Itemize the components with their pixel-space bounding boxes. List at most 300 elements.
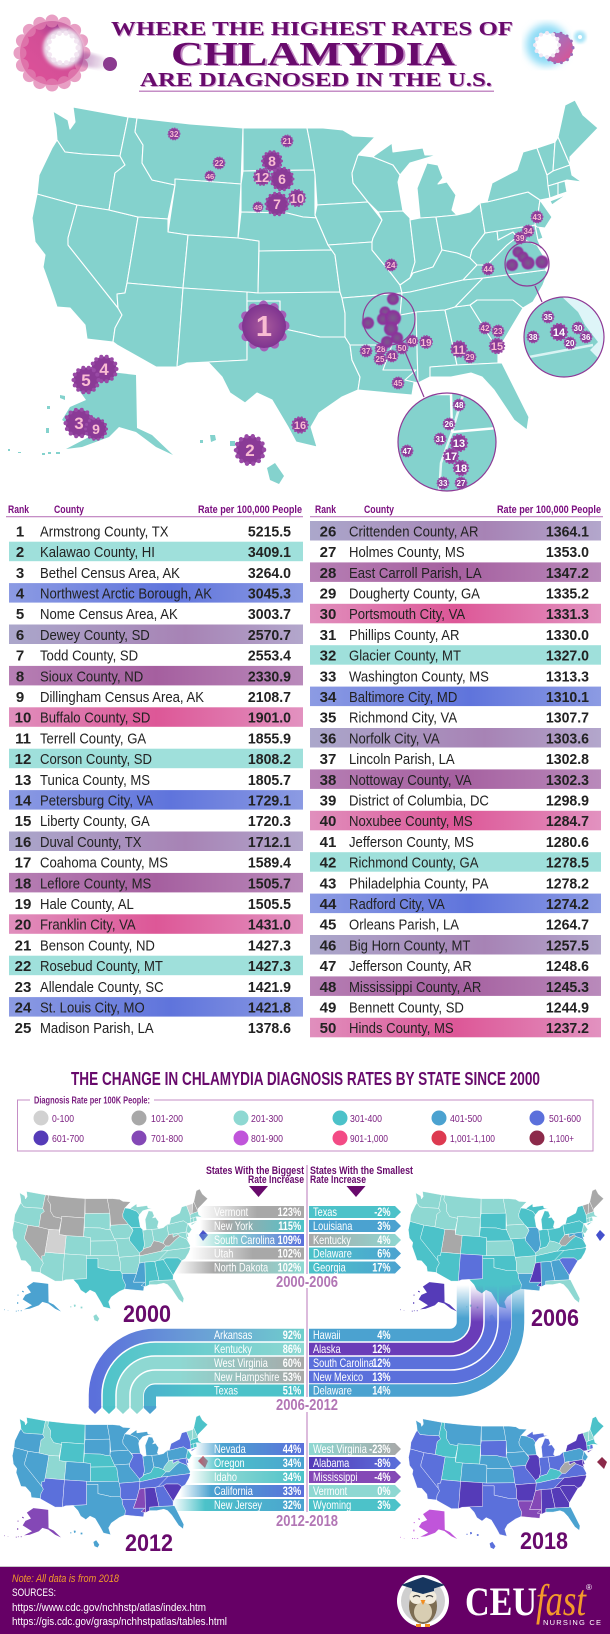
- legend: 101-200: [151, 1113, 183, 1125]
- map markers: ranked counties: [66, 128, 542, 464]
- rates: 5215.5: [248, 524, 291, 541]
- rates: 1310.1: [546, 690, 589, 706]
- bars: 2012-2018 smallest increases: Wyoming: [313, 1500, 351, 1512]
- map markers: ranked counties: 16: [294, 420, 306, 432]
- map markers: ranked counties: 6: [278, 171, 286, 187]
- bars: 2012-2018 biggest increases: Nevada: [214, 1444, 246, 1456]
- curved arrows: 2006-2012 smallest increases: Delaware: [313, 1386, 352, 1398]
- bars: 2012-2018 smallest increases: 3%: [377, 1500, 391, 1512]
- county names: Liberty County, GA: [40, 812, 150, 829]
- rank numbers: 4: [16, 586, 25, 602]
- rates: 1347.2: [546, 565, 589, 582]
- marker: rank 1: [242, 304, 286, 348]
- title: ARE DIAGNOSED IN THE U.S.: [141, 70, 493, 92]
- county names: Norfolk City, VA: [349, 730, 440, 747]
- legend: 601-700: [52, 1133, 84, 1145]
- bars: 2000-2006 biggest increases: New York: [214, 1221, 254, 1233]
- rank numbers: 24: [15, 1000, 32, 1016]
- inset: Mississippi Delta counties: 27: [457, 479, 466, 488]
- bars: 2000-2006 smallest increases: 3%: [377, 1221, 391, 1233]
- bars: 2012-2018 smallest increases: 0%: [377, 1486, 391, 1498]
- bars: 2012-2018 biggest increases: Oregon: [214, 1458, 245, 1470]
- rates: 1327.0: [546, 648, 589, 665]
- curved arrows: 2006-2012 biggest increases: New Hampshire: [214, 1372, 280, 1384]
- rank numbers: 26: [320, 523, 336, 540]
- curved arrows: 2006-2012 smallest increases: [309, 1285, 518, 1398]
- logo: CEUfast Nursing CE: [465, 1576, 601, 1627]
- county names: Bethel Census Area, AK: [40, 564, 180, 581]
- inset: Virginia counties: 14: [553, 327, 566, 339]
- county names: Dewey County, SD: [40, 626, 150, 643]
- rates: 1303.6: [546, 731, 589, 748]
- county names: [40, 523, 213, 1036]
- curved arrows: 2006-2012 smallest increases: 12%: [372, 1344, 391, 1356]
- title: CHLAMYDIA: [171, 36, 456, 73]
- rates: 1505.5: [248, 897, 291, 913]
- title: CHLAMYDIA: [173, 37, 458, 74]
- bars: 2000-2006 biggest increases: Utah: [214, 1249, 234, 1261]
- rank numbers: 45: [320, 917, 336, 934]
- legend: 201-300: [251, 1113, 283, 1125]
- year label: 2012: 2012: [125, 1530, 173, 1557]
- rank numbers: 47: [320, 958, 336, 975]
- county names: Benson County, ND: [40, 937, 155, 954]
- inset: Mississippi Delta counties: 17: [445, 451, 457, 463]
- bars: 2000-2006 biggest increases: 102%: [278, 1263, 301, 1275]
- bars: 2012-2018 biggest increases: 33%: [283, 1486, 301, 1498]
- curved arrows: 2006-2012 smallest increases: New Mexico: [313, 1372, 363, 1384]
- rates: 3003.7: [248, 607, 291, 623]
- map markers: ranked counties: 4: [99, 360, 109, 379]
- table header: Rate per 100,000 People: [198, 504, 302, 516]
- rates: 1330.0: [546, 628, 589, 644]
- rank numbers: 2: [16, 544, 24, 561]
- map markers: ranked counties: 34: [524, 227, 533, 236]
- map markers: ranked counties: 43: [533, 213, 542, 222]
- bars: 2000-2006 smallest increases: -2%: [374, 1207, 391, 1219]
- inset: Virginia counties: [524, 295, 610, 377]
- bars: 2000-2006 biggest increases: 109%: [278, 1235, 301, 1247]
- county names: Noxubee County, MS: [349, 812, 473, 829]
- rank numbers: 22: [15, 958, 31, 975]
- rank numbers: 11: [15, 730, 31, 747]
- map markers: ranked counties: 24: [387, 261, 396, 270]
- table header: [310, 504, 603, 517]
- rates: 1248.6: [546, 959, 589, 975]
- curved arrows: 2006-2012 smallest increases: 14%: [372, 1386, 391, 1398]
- unnumbered marker cluster: Mississippi Delta: [362, 293, 403, 348]
- curved arrows: 2006-2012 biggest increases: 60%: [283, 1358, 301, 1370]
- rank numbers: 46: [320, 937, 336, 954]
- map markers: ranked counties: 2: [245, 441, 255, 460]
- county names: Glacier County, MT: [349, 647, 461, 664]
- county names: Sioux County, ND: [40, 667, 143, 684]
- county names: St. Louis City, MO: [40, 999, 145, 1016]
- map markers: ranked counties: 11: [453, 343, 466, 357]
- rates: 1335.2: [546, 586, 589, 603]
- county names: Corson County, SD: [40, 750, 152, 767]
- bars: 2000-2006 smallest increases: Louisiana: [313, 1221, 353, 1233]
- table header: County: [364, 504, 395, 516]
- rates: 1257.5: [546, 938, 589, 955]
- map markers: ranked counties: 12: [255, 170, 269, 185]
- period label: 2012-2018: 2012-2018: [276, 1513, 338, 1530]
- map markers: ranked counties: 42: [481, 324, 490, 333]
- table header: County: [54, 504, 85, 516]
- table header: Rank: [8, 504, 30, 516]
- inset: Mississippi Delta counties: 33: [439, 479, 448, 488]
- bars: 2012-2018 biggest increases: 32%: [283, 1500, 301, 1512]
- map markers: ranked counties: 49: [254, 203, 262, 212]
- bars: 2012-2018 smallest increases: Alabama: [313, 1458, 349, 1470]
- county names: Phillips County, AR: [349, 626, 460, 643]
- bars: 2000-2006 biggest increases: North Dakota: [214, 1263, 268, 1275]
- row highlight bands: [310, 521, 601, 1037]
- bars: 2012-2018 biggest increases: 44%: [283, 1444, 301, 1456]
- curved arrows: 2006-2012 smallest increases: 13%: [372, 1372, 391, 1384]
- period label: 2000-2006: 2000-2006: [276, 1274, 338, 1291]
- rank numbers: 14: [15, 792, 32, 810]
- county names: Duval County, TX: [40, 833, 142, 850]
- rank numbers: 35: [320, 710, 336, 727]
- bars: 2000-2006 biggest increases: 123%: [278, 1207, 301, 1219]
- table header: Rank: [315, 504, 337, 516]
- center timeline line: [306, 1165, 308, 1512]
- curved arrows: 2006-2012 biggest increases: Arkansas: [214, 1330, 252, 1342]
- rates: 2570.7: [248, 628, 291, 644]
- bars: 2012-2018 biggest increases: 34%: [283, 1458, 301, 1470]
- county names: Franklin City, VA: [40, 916, 136, 933]
- map markers: ranked counties: 41: [388, 352, 397, 361]
- map markers: ranked counties: 28: [377, 345, 386, 354]
- rank numbers: 21: [15, 937, 31, 954]
- rank numbers: 8: [16, 668, 24, 685]
- county names: Crittenden County, AR: [349, 523, 478, 540]
- year label: 2018: 2018: [520, 1528, 568, 1555]
- map markers: ranked counties: 29: [466, 353, 475, 362]
- rank numbers: 17: [15, 855, 31, 872]
- logo: CEUfast Nursing CE: ®: [586, 1583, 592, 1592]
- rates: 1245.3: [546, 979, 589, 996]
- rates: 1421.9: [248, 979, 291, 996]
- curved arrows: 2006-2012 smallest increases: 4%: [377, 1330, 391, 1342]
- bars: 2000-2006 biggest increases: [175, 1206, 304, 1275]
- county names: Portsmouth City, VA: [349, 605, 466, 622]
- rank numbers: 29: [320, 586, 336, 602]
- rank numbers: 13: [15, 772, 31, 789]
- map markers: ranked counties: 50: [398, 344, 407, 353]
- bars: 2012-2018 smallest increases: West Virginia: [313, 1444, 367, 1456]
- rank numbers: 25: [15, 1020, 31, 1037]
- curved arrows: 2006-2012 biggest increases: 51%: [283, 1386, 301, 1398]
- rates: 1808.2: [248, 752, 291, 768]
- county names: Dillingham Census Area, AK: [40, 688, 205, 705]
- bars: 2000-2006 smallest increases: Georgia: [313, 1263, 346, 1275]
- rank numbers: 27: [320, 544, 336, 561]
- rank numbers: 49: [320, 1000, 336, 1016]
- period label: 2006-2012: 2006-2012: [276, 1397, 338, 1414]
- curved arrows: 2006-2012 biggest increases: 53%: [283, 1372, 301, 1384]
- rank numbers: 39: [320, 792, 336, 810]
- bars: 2000-2006 smallest increases: Texas: [313, 1207, 337, 1219]
- rank numbers: 19: [15, 896, 31, 913]
- rank numbers: 40: [320, 813, 336, 830]
- inset: Virginia counties: 20: [566, 339, 575, 348]
- rates: 1244.9: [546, 1000, 589, 1017]
- curved arrows: 2006-2012 smallest increases: South Carolina: [313, 1358, 374, 1370]
- icon: pink chlamydia cell: [20, 21, 117, 85]
- rates: 1307.7: [546, 710, 589, 727]
- county names: Tunica County, MS: [40, 771, 150, 788]
- bars: 2000-2006 smallest increases: 17%: [372, 1263, 391, 1275]
- rank numbers: 44: [320, 896, 337, 913]
- rates: 1264.7: [546, 917, 589, 934]
- county names: Madison Parish, LA: [40, 1019, 154, 1036]
- county names: Baltimore City, MD: [349, 688, 457, 705]
- map: contiguous United States with Alaska and Hawaii: [8, 100, 598, 484]
- note and sources: Note: All data is from 2018: [12, 1573, 120, 1585]
- rank numbers: 33: [320, 668, 336, 685]
- rank numbers: 36: [320, 730, 336, 747]
- bars: 2000-2006 smallest increases: [309, 1206, 401, 1275]
- county names: Big Horn County, MT: [349, 937, 471, 954]
- note and sources: https://gis.cdc.gov/grasp/nchhstpatlas/tables.html: [12, 1616, 227, 1628]
- rates: 1421.8: [248, 1000, 291, 1017]
- rates: 3409.1: [248, 545, 291, 561]
- logo: CEUfast Nursing CE: NURSING CE: [543, 1618, 601, 1627]
- county names: Nottoway County, VA: [349, 771, 472, 788]
- curved arrows: 2006-2012 biggest increases: Texas: [214, 1386, 238, 1398]
- map markers: ranked counties: 7: [273, 196, 281, 212]
- county names: Jefferson County, AR: [349, 957, 472, 974]
- map: 2012: [4, 1415, 208, 1547]
- rates: 1364.1: [546, 524, 589, 541]
- rates: 1378.6: [248, 1021, 291, 1037]
- rates: 1427.3: [248, 938, 291, 955]
- rank numbers: 41: [320, 834, 336, 851]
- county names: Allendale County, SC: [40, 978, 164, 995]
- rates: 1278.5: [546, 855, 589, 872]
- table header: [6, 504, 303, 517]
- note and sources: [12, 1573, 227, 1628]
- bars: 2000-2006 smallest increases: 4%: [377, 1235, 391, 1247]
- bars: 2012-2018 biggest increases: 34%: [283, 1472, 301, 1484]
- bars: 2012-2018 smallest increases: -23%: [369, 1444, 391, 1456]
- icon: owl mascot: [397, 1575, 449, 1627]
- bars: 2012-2018 biggest increases: [172, 1443, 304, 1512]
- column heading: smallest rate increase: Rate Increase: [310, 1174, 366, 1186]
- rank numbers: 30: [320, 606, 336, 623]
- unnumbered marker cluster: Virginia: [506, 246, 548, 271]
- map markers: ranked counties: 3: [74, 414, 84, 433]
- county names: Terrell County, GA: [40, 730, 147, 747]
- legend: 0-100: [52, 1113, 74, 1125]
- rates: 2553.4: [248, 648, 292, 665]
- rates: [248, 524, 292, 1037]
- map markers: ranked counties: 46: [206, 172, 214, 181]
- footer: [0, 1566, 610, 1634]
- table: ranks 1 to 25: [6, 504, 303, 1037]
- column heading: smallest rate increase: States With the Smallest: [310, 1165, 413, 1177]
- county names: Nome Census Area, AK: [40, 605, 178, 622]
- county names: Philadelphia County, PA: [349, 874, 489, 891]
- inset: Mississippi Delta counties: 26: [445, 420, 454, 429]
- curved arrows: 2006-2012 biggest increases: [89, 1330, 304, 1414]
- county names: Orleans Parish, LA: [349, 916, 460, 933]
- county names: Radford City, VA: [349, 895, 445, 912]
- rates: 1302.8: [546, 752, 589, 768]
- bars: 2000-2006 smallest increases: Kentucky: [313, 1235, 352, 1247]
- bars: 2000-2006 smallest increases: Delaware: [313, 1249, 352, 1261]
- rates: 1901.0: [248, 710, 291, 727]
- inset: Virginia counties: 36: [582, 333, 591, 342]
- county names: Todd County, SD: [40, 647, 138, 664]
- rank numbers: 32: [320, 648, 336, 665]
- curved arrows: 2006-2012 smallest increases: 12%: [372, 1358, 391, 1370]
- inset: Virginia counties: 35: [544, 313, 553, 322]
- county names: Armstrong County, TX: [40, 523, 169, 540]
- rank numbers: 16: [15, 834, 31, 851]
- rates: 1720.3: [248, 814, 291, 830]
- rates: 1712.1: [248, 835, 291, 851]
- column heading: biggest rate increase: [206, 1165, 304, 1197]
- county names: Dougherty County, GA: [349, 585, 480, 602]
- map markers: ranked counties: 21: [283, 137, 292, 146]
- rank numbers: 9: [16, 689, 24, 706]
- map markers: ranked counties: 22: [215, 159, 224, 168]
- curved arrows: 2006-2012 biggest increases: West Virginia: [214, 1358, 268, 1370]
- bars: 2012-2018 biggest increases: Idaho: [214, 1472, 237, 1484]
- curved arrows: 2006-2012 smallest increases: Alaska: [313, 1344, 341, 1356]
- map markers: ranked counties: 25: [376, 355, 385, 364]
- county names: Kalawao County, HI: [40, 543, 155, 560]
- column heading: smallest rate increase: [310, 1165, 413, 1197]
- county names: East Carroll Parish, LA: [349, 564, 482, 581]
- legend: [18, 1094, 593, 1151]
- county names: Mississippi County, AR: [349, 978, 481, 995]
- bars: 2000-2006 biggest increases: 102%: [278, 1249, 301, 1261]
- rank numbers: 6: [16, 627, 24, 644]
- icon: blue chlamydia cell: [526, 24, 586, 66]
- bars: 2012-2018 smallest increases: [309, 1443, 401, 1512]
- title: ARE DIAGNOSED IN THE U.S.: [140, 69, 492, 91]
- bars: 2000-2006 biggest increases: South Carolina: [214, 1235, 275, 1247]
- map: 2006: [400, 1189, 604, 1321]
- rank numbers: [320, 523, 337, 1037]
- map markers: ranked counties: 39: [516, 234, 525, 243]
- rates: 1505.7: [248, 876, 291, 892]
- inset: Mississippi Delta counties: 18: [455, 463, 467, 475]
- county names: District of Columbia, DC: [349, 792, 489, 809]
- county names: Lincoln Parish, LA: [349, 750, 455, 767]
- icon: DC markers beside maps: [198, 1230, 607, 1469]
- title: [111, 18, 514, 92]
- county names: Buffalo County, SD: [40, 709, 150, 726]
- rates: 1274.2: [546, 897, 589, 913]
- rank numbers: 12: [15, 751, 31, 768]
- curved arrows: 2006-2012 biggest increases: 86%: [283, 1344, 301, 1356]
- rates: 2330.9: [248, 669, 291, 685]
- bars: 2000-2006 smallest increases: 6%: [377, 1249, 391, 1261]
- rank numbers: 28: [320, 565, 336, 582]
- legend: 401-500: [450, 1113, 482, 1125]
- rank numbers: 20: [15, 917, 31, 934]
- logo: CEUfast Nursing CE: fast: [536, 1576, 587, 1625]
- bars: 2012-2018 biggest increases: New Jersey: [214, 1500, 263, 1512]
- map markers: ranked counties: 45: [394, 379, 403, 388]
- map markers: ranked counties: 10: [290, 191, 304, 206]
- map markers: ranked counties: 8: [268, 153, 276, 169]
- curved arrows: 2006-2012 biggest increases: Kentucky: [214, 1344, 253, 1356]
- rates: [546, 524, 589, 1037]
- legend: 301-400: [350, 1113, 382, 1125]
- map markers: ranked counties: 9: [92, 421, 100, 437]
- rank numbers: 43: [320, 875, 336, 892]
- rates: 1298.9: [546, 793, 589, 810]
- rank numbers: 1: [16, 523, 24, 540]
- rates: 2108.7: [248, 690, 291, 706]
- rank numbers: 15: [15, 813, 31, 830]
- inset leader lines and region rings: [363, 242, 549, 397]
- map markers: ranked counties: 15: [491, 341, 503, 353]
- bars: 2000-2006 biggest increases: Vermont: [214, 1207, 248, 1219]
- row highlight bands: [9, 542, 303, 1017]
- note and sources: https://www.cdc.gov/nchhstp/atlas/index.htm: [12, 1602, 206, 1614]
- county names: Coahoma County, MS: [40, 854, 168, 871]
- rank numbers: 50: [320, 1020, 336, 1037]
- rates: 3264.0: [248, 565, 291, 582]
- rank numbers: [15, 523, 32, 1037]
- county names: Washington County, MS: [349, 667, 489, 684]
- county names: Leflore County, MS: [40, 874, 151, 891]
- map: 2000: [4, 1189, 208, 1321]
- map: 2018: [400, 1416, 604, 1549]
- rates: 1805.7: [248, 772, 291, 789]
- rank numbers: 38: [320, 772, 336, 789]
- county names: Bennett County, SD: [349, 999, 464, 1016]
- legend: 701-800: [151, 1133, 183, 1145]
- county names: Hinds County, MS: [349, 1019, 454, 1036]
- inset: Virginia counties: 38: [529, 333, 538, 342]
- marker: rank 1: 1: [256, 311, 272, 343]
- inset: Mississippi Delta counties: [398, 393, 497, 495]
- bars: 2012-2018 smallest increases: Mississippi: [313, 1472, 357, 1484]
- rates: 1353.0: [546, 545, 589, 561]
- map markers: ranked counties: 37: [362, 347, 371, 356]
- map markers: ranked counties: 32: [170, 130, 179, 139]
- inset: Mississippi Delta counties: 31: [436, 435, 445, 444]
- inset: Mississippi Delta counties: 47: [403, 447, 412, 456]
- rank numbers: 48: [320, 979, 336, 996]
- rates: 1331.3: [546, 607, 589, 623]
- rank numbers: 18: [15, 875, 31, 892]
- rank numbers: 42: [320, 855, 336, 872]
- column heading: biggest rate increase: States With the Biggest: [206, 1165, 304, 1177]
- title: WHERE THE HIGHEST RATES OF: [111, 18, 513, 40]
- logo: CEUfast Nursing CE: CEU: [465, 1579, 537, 1624]
- rank numbers: 3: [16, 565, 24, 582]
- legend: 801-900: [251, 1133, 283, 1145]
- map markers: ranked counties: 40: [408, 337, 417, 346]
- map markers: ranked counties: 5: [81, 371, 91, 390]
- inset: Mississippi Delta counties: 13: [453, 438, 465, 450]
- rates: 1284.7: [546, 814, 589, 830]
- rank numbers: 37: [320, 751, 336, 768]
- year label: 2000: 2000: [123, 1301, 171, 1328]
- rank numbers: 23: [15, 979, 31, 996]
- inset: Virginia counties: 30: [574, 324, 583, 333]
- rank numbers: 5: [16, 606, 24, 623]
